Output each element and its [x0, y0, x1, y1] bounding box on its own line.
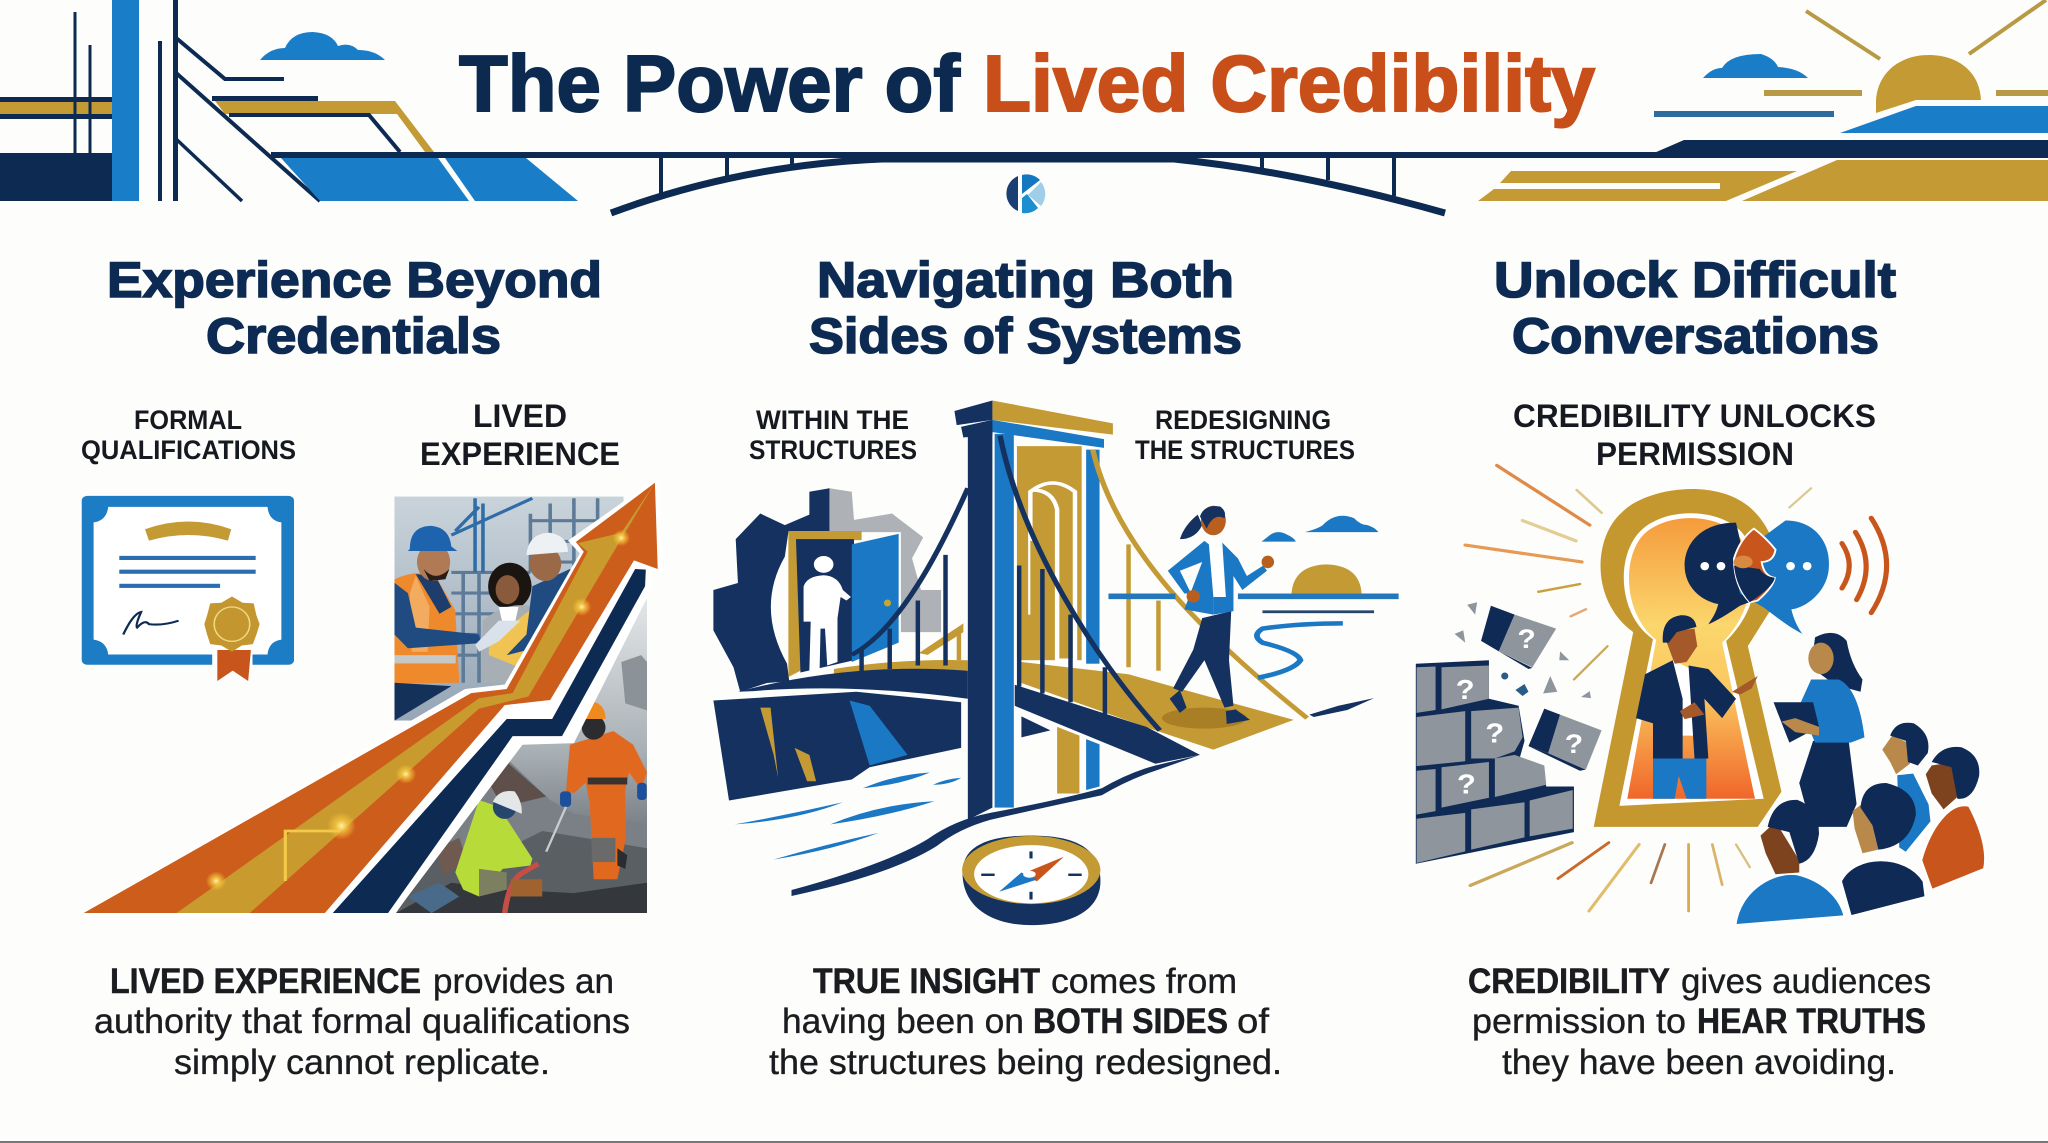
label: credibility unlocks permission: CREDIBILITY UNLOCKS: [1513, 398, 1876, 434]
icon: crumbling brick wall: ?: [1485, 719, 1504, 749]
label: credibility unlocks permission: PERMISSION: [1596, 436, 1794, 472]
icon: walking woman: [1168, 506, 1274, 724]
text block: credibility: permission to: [1472, 1002, 1686, 1041]
panel: unlock difficult conversations: [1416, 252, 1985, 1082]
text block: credibility: gives audiences: [1681, 962, 1931, 1001]
heading: navigating both sides of systems: Navigating Both: [817, 252, 1234, 308]
photo: disaster response workers: [394, 586, 647, 914]
audience member in blue collar: [1882, 723, 1932, 853]
icon: certificate: [82, 496, 294, 681]
icon: crumbling brick wall: [1416, 602, 1602, 864]
falling block upper: [1481, 606, 1556, 669]
text block: credibility: they have been avoiding.: [1502, 1043, 1896, 1082]
audience member in blue: [1735, 800, 1845, 925]
text block: lived experience: simply cannot replicate.: [174, 1043, 550, 1082]
text block: true insight: BOTH SIDES: [1033, 1002, 1228, 1041]
label: redesigning the structures: REDESIGNING: [1155, 405, 1331, 435]
illustration: keyhole conversation: [1416, 465, 1985, 925]
text block: true insight: of: [1237, 1002, 1269, 1041]
water strokes: [735, 772, 961, 860]
text block: true insight: comes from: [1051, 962, 1237, 1001]
title: [459, 39, 1595, 128]
icon: audience: [1735, 723, 1985, 925]
label: formal qualifications: QUALIFICATIONS: [81, 435, 296, 465]
falling block lower: ?: [1565, 730, 1583, 760]
icon: speaker: [1636, 615, 1758, 799]
heading: unlock difficult conversations: Conversations: [1512, 308, 1879, 364]
label: lived experience: [420, 398, 620, 472]
heading: unlock difficult conversations: Unlock Difficult: [1494, 252, 1896, 308]
icon: crumbling brick wall: ?: [1456, 675, 1475, 705]
label: credibility unlocks permission: [1513, 398, 1876, 472]
woman with document: [475, 563, 536, 683]
title: The Power of: [459, 39, 960, 128]
text block: true insight: having been on: [782, 1002, 1024, 1041]
label: lived experience: LIVED: [473, 398, 567, 434]
kneeling worker in lime: [455, 791, 566, 913]
icon: speech bubbles and puzzle: [1685, 518, 1887, 634]
left skyline structure: [0, 0, 578, 201]
heading: unlock difficult conversations: [1494, 252, 1896, 364]
text block: true insight: the structures being redesigned.: [769, 1043, 1282, 1082]
illustration: certificate, photos and arrow: [76, 477, 663, 917]
heading: experience beyond credentials: Credentials: [206, 308, 501, 364]
label: redesigning the structures: THE STRUCTURES: [1135, 435, 1355, 465]
header band artwork: [0, 0, 2048, 213]
icon: crumbling brick wall: ?: [1457, 770, 1476, 800]
title: Lived Credibility: [983, 39, 1595, 128]
icon: K logo: [1006, 174, 1045, 213]
text block: lived experience: authority that formal qualifications: [94, 1002, 630, 1041]
icon: door with person: [788, 531, 899, 677]
label: within the structures: STRUCTURES: [749, 435, 917, 465]
label: redesigning the structures: [1135, 405, 1355, 465]
text block: true insight: TRUE INSIGHT: [813, 962, 1040, 1001]
heading: navigating both sides of systems: [809, 252, 1242, 364]
rescue worker in orange: [560, 702, 647, 879]
panel: navigating both sides of systems: [713, 252, 1399, 1082]
text block: true insight: [769, 962, 1282, 1082]
heading: navigating both sides of systems: Sides of Systems: [809, 308, 1242, 364]
icon: compass: [962, 836, 1100, 925]
text block: lived experience: LIVED EXPERIENCE: [110, 962, 421, 1001]
panel: experience beyond credentials: [76, 252, 663, 1082]
icon: left cloud: [260, 32, 385, 60]
right landscape with sun: [1478, 0, 2048, 201]
audience member in orange: [1921, 747, 1985, 890]
icon: right cloud: [1703, 54, 1808, 78]
falling block lower: [1528, 709, 1602, 771]
text block: credibility: CREDIBILITY: [1468, 962, 1670, 1001]
label: within the structures: WITHIN THE: [756, 405, 909, 435]
sun, horizon and river: [1108, 516, 1399, 678]
icon: golden keyhole: [1594, 489, 1781, 827]
illustration: bridge between systems: [713, 401, 1399, 925]
label: lived experience: EXPERIENCE: [420, 436, 620, 472]
arrow: rising experience: [76, 477, 663, 917]
heading: experience beyond credentials: [107, 252, 602, 364]
icon: gear: [713, 488, 941, 692]
heading: experience beyond credentials: Experience Beyond: [107, 252, 602, 308]
label: formal qualifications: [81, 405, 296, 465]
light rays: [1465, 465, 1811, 911]
worker in white hard hat: [507, 533, 574, 655]
icon: woman with tablet: [1774, 633, 1864, 827]
worker in blue hard hat: [394, 526, 481, 721]
falling block upper: ?: [1517, 624, 1536, 654]
text block: credibility: HEAR TRUTHS: [1697, 1002, 1926, 1041]
bridge tower and deck: [713, 401, 1374, 896]
text block: lived experience: provides an: [433, 962, 614, 1001]
text block: credibility: [1468, 962, 1931, 1082]
label: formal qualifications: FORMAL: [134, 405, 242, 435]
audience member in navy: [1841, 783, 1926, 916]
photo: construction site team: [394, 497, 624, 721]
text block: lived experience: [94, 962, 630, 1082]
label: within the structures: [749, 405, 917, 465]
bridge deck and arch: [271, 152, 2041, 213]
